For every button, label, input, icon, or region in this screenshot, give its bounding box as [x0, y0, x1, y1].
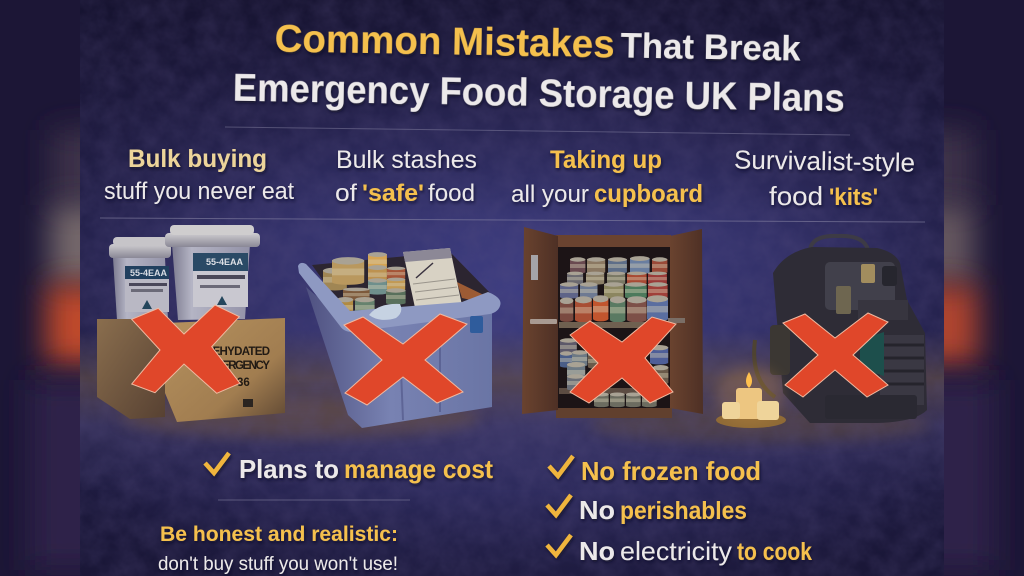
checklist: no electricity	[547, 535, 812, 566]
icon: check	[205, 453, 229, 473]
heading: survivalist kits: food	[769, 181, 823, 211]
checklist: no electricity: to cook	[737, 538, 812, 566]
icon: tub body	[306, 287, 492, 428]
checklist: no perishables: perishables	[620, 497, 747, 525]
heading: bulk stashes: food	[428, 180, 475, 207]
heading: bulk stashes	[335, 146, 477, 207]
red cross 4	[783, 313, 888, 397]
illustration: tactical backpack and candles	[716, 236, 927, 428]
heading: taking up: cupboard	[594, 180, 703, 208]
illustration: storage tub of cans	[298, 248, 500, 428]
icon: tub cans	[312, 252, 495, 318]
checklist: manage cost	[205, 453, 493, 484]
heading: bulk buying: stuff you never eat	[104, 178, 294, 205]
icon: check	[549, 456, 573, 476]
red cross 1	[132, 305, 240, 393]
heading: bulk stashes: Bulk stashes	[336, 146, 477, 174]
checklist: no electricity: electricity	[620, 536, 732, 566]
title	[232, 17, 846, 120]
icon: check	[547, 535, 571, 555]
heading: bulk stashes: 'safe'	[362, 180, 424, 207]
title: Common Mistakes	[274, 17, 615, 66]
red cross 2	[344, 314, 467, 405]
illustration: cupboard full of cans	[522, 227, 703, 418]
icon: candles	[716, 367, 786, 428]
icon: large bucket	[165, 225, 260, 320]
title: That Break	[620, 26, 801, 69]
checklist: no perishables: No	[579, 495, 615, 525]
icon: large bucket: 55-4EAA	[206, 257, 244, 267]
icon: checklist clipboard	[403, 248, 463, 317]
icon: left door	[522, 227, 558, 414]
icon: small bucket	[109, 237, 171, 320]
heading: taking up: Taking up	[550, 146, 662, 174]
checklist: no frozen food: No frozen food	[581, 456, 761, 486]
red cross 3	[570, 317, 676, 403]
heading: taking up: all your	[511, 181, 589, 208]
heading: survivalist kits	[734, 144, 915, 211]
icon: tub rim	[298, 263, 500, 332]
icon: upper shelf cans	[560, 256, 668, 322]
icon: right cardboard box	[165, 318, 285, 422]
icon: cupboard frame	[556, 235, 671, 248]
icon: lower shelf cans	[560, 338, 668, 407]
title: Emergency Food Storage UK Plans	[232, 67, 845, 120]
icon: backpack	[754, 236, 927, 423]
heading: survivalist kits: 'kits'	[829, 184, 878, 211]
icon: right cardboard box: 36	[237, 377, 250, 389]
icon: right cardboard box: ERGENCY	[222, 360, 270, 372]
icon: check	[547, 495, 571, 515]
heading: bulk buying: Bulk buying	[128, 145, 267, 173]
icon: left cardboard box	[97, 319, 165, 419]
illustration: buckets and boxes	[97, 225, 285, 422]
heading: survivalist kits: Survivalist-style	[734, 144, 915, 178]
icon: right door	[668, 229, 703, 414]
checklist: no electricity: No	[579, 536, 615, 566]
callout: be honest: don't buy stuff you won't use!	[158, 554, 398, 575]
icon: small bucket: 55-4EAA	[130, 268, 168, 278]
checklist: no perishables	[547, 495, 747, 525]
checklist: manage cost: Plans to	[239, 454, 339, 484]
callout: be honest	[158, 523, 398, 575]
checklist: manage cost: manage cost	[344, 454, 493, 484]
heading: taking up	[511, 146, 703, 208]
heading: bulk buying	[104, 145, 294, 205]
callout: be honest: Be honest and realistic:	[160, 523, 398, 546]
icon: right cardboard box: DEHYDATED	[205, 346, 270, 358]
icon: shelves	[559, 322, 669, 394]
heading: bulk stashes: of	[335, 180, 357, 207]
